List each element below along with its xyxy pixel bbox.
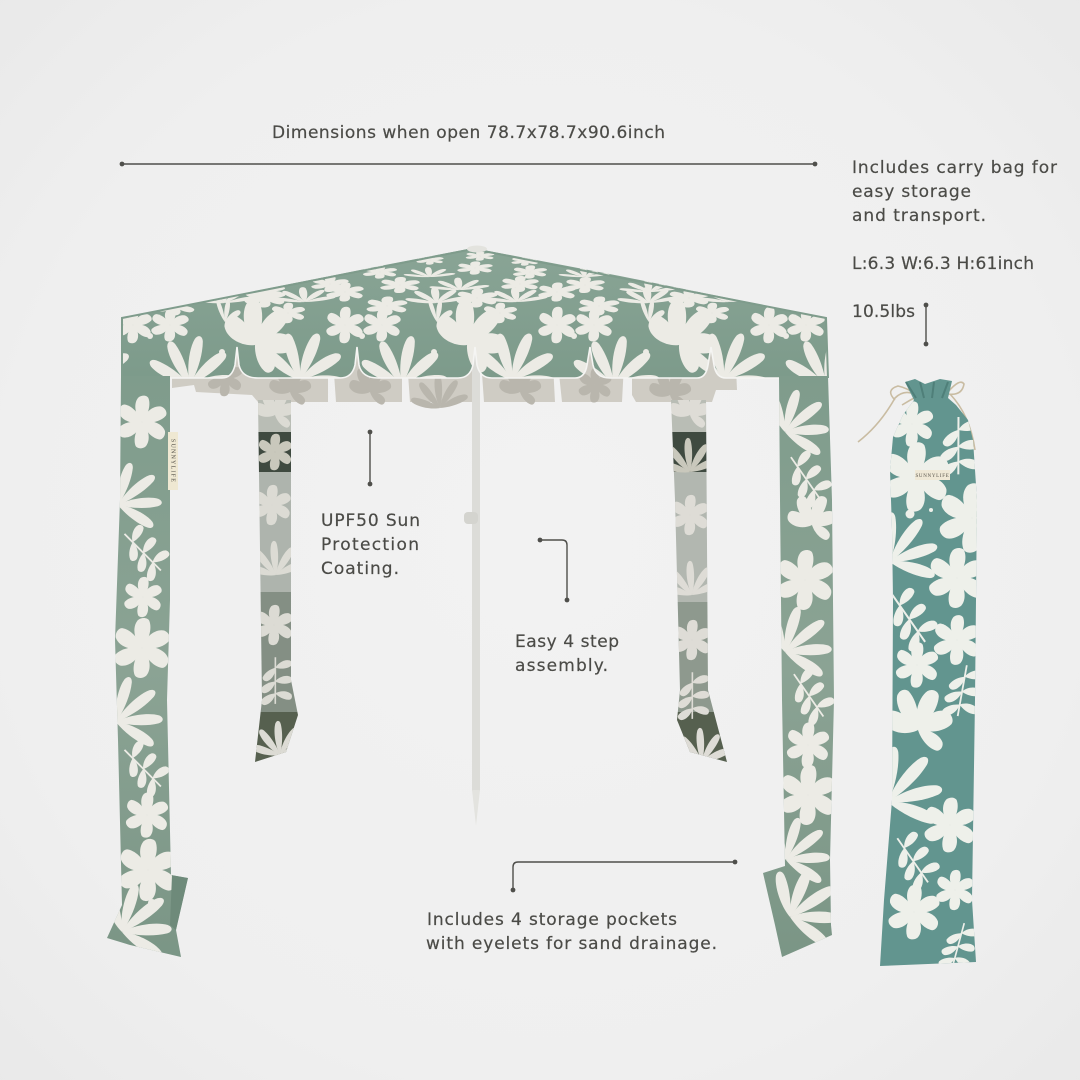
callout: UPF50: Coating. [321, 559, 399, 579]
carry bag [858, 379, 977, 966]
callout: UPF50 [321, 430, 420, 579]
bag brand label: SUNNYLIFE [915, 474, 950, 479]
callout: storage pockets: with eyelets for sand drainage. [426, 934, 717, 954]
back left leg [255, 400, 298, 762]
callout: storage pockets: Includes 4 storage pockets [427, 910, 677, 930]
callout: storage pockets [426, 860, 737, 954]
bag dimensions: L:6.3 W:6.3 H:61inch [852, 254, 1034, 274]
callout: UPF50: UPF50 Sun [321, 511, 420, 531]
brand label on leg [168, 432, 178, 490]
centre pole [464, 346, 480, 826]
brand label on leg: SUNNYLIFE [170, 439, 176, 483]
heading: open dimensions [120, 123, 817, 166]
callout: assembly: Easy 4 step [515, 632, 619, 652]
bag brand label [915, 470, 950, 480]
back scallop valance [172, 345, 737, 412]
callout: assembly [515, 538, 619, 676]
bag weight with leader: 10.5lbs [852, 302, 915, 322]
bag weight with leader [852, 302, 928, 346]
front right leg [763, 376, 834, 957]
callout: assembly: assembly. [515, 656, 608, 676]
callout: UPF50: Protection [321, 535, 419, 555]
carry bag text: Includes carry bag for [852, 158, 1057, 178]
carry bag text: easy storage [852, 182, 971, 202]
back right leg [671, 400, 727, 762]
carry bag text [852, 158, 1057, 226]
carry bag text: and transport. [852, 206, 986, 226]
heading: open dimensions: Dimensions when open 78.7x78.7x90.6inch [272, 123, 665, 143]
bag drawstring [858, 382, 975, 450]
front left leg [107, 376, 188, 957]
canopy roof [121, 246, 829, 379]
